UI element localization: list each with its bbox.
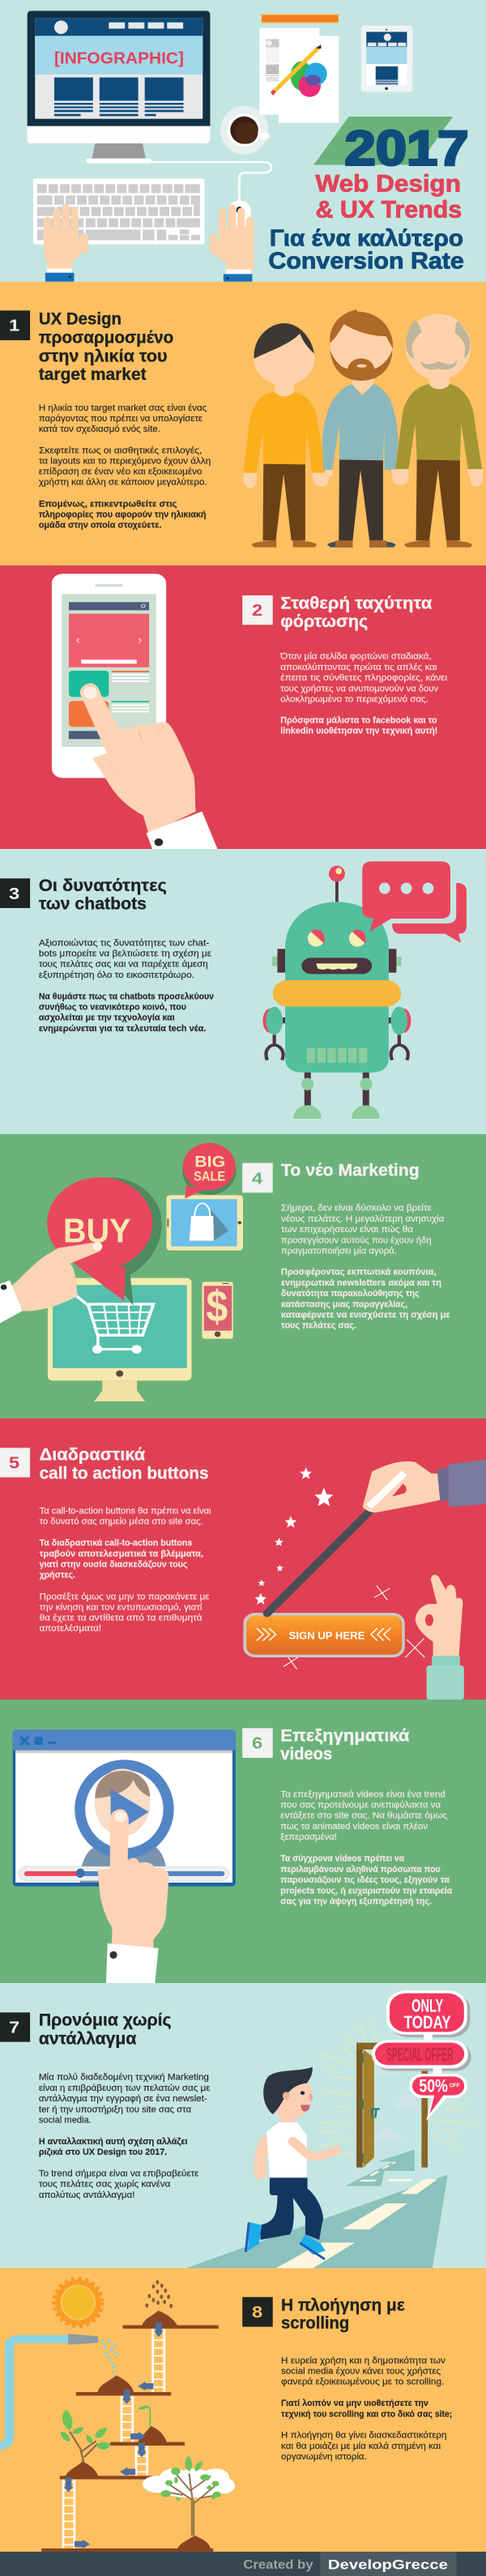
text block: πραγματοποιήσει μία αγορά. (281, 1245, 397, 1256)
text block: αντάλλαγμα την εγγραφή σε ένα newslet- (39, 2093, 207, 2104)
heading (39, 2011, 172, 2048)
panel: 6 explainer videos (0, 1700, 486, 1983)
panel: 3 chatbots (0, 849, 486, 1134)
text block: σας για την άψογη εξυπηρέτησή της. (280, 1896, 432, 1906)
icon: tree (143, 2456, 235, 2535)
icon: hand holding wand (363, 1460, 486, 1512)
number badge 7: 7 (9, 2018, 19, 2036)
illustration: door (356, 2043, 428, 2168)
title: Conversion Rate (268, 249, 464, 274)
illustration: walking boy (245, 2067, 336, 2259)
number badge 5 (0, 1448, 30, 1478)
illustration: offer sign: OFF (450, 2082, 460, 2089)
text block: τους πελάτες σας και να παρέχετε άμεση (39, 958, 208, 969)
number badge 8 (242, 2297, 273, 2327)
icon: monitor with cart (48, 1278, 191, 1401)
number badge 2: 2 (252, 600, 262, 620)
icon: sun (55, 2280, 101, 2326)
text block: το δυνατό σας σημείο μέσα στο site σας. (40, 1516, 203, 1526)
icon: water hose (0, 2334, 118, 2446)
text block: ξεπερασμένα! (280, 1832, 337, 1842)
number badge 1 (0, 310, 30, 340)
text block: ομάδα στην οποία στοχεύετε. (39, 519, 161, 530)
text block: προσεγγίσουν αυτούς που έχουν ήδη (281, 1235, 432, 1245)
text block: κατάστασης μιας παραγγελίας, (281, 1299, 407, 1309)
icon: desktop monitor: [INFOGRAPHIC] (54, 49, 184, 67)
text block: Τα call-to-action buttons θα πρέπει να είναι (40, 1505, 211, 1516)
text block: αποκαλύπτοντας πρώτα τις απλές και (280, 662, 437, 672)
icon: tablet (361, 26, 412, 92)
text block: πληροφορίες που αφορούν την ηλικιακή (39, 509, 206, 519)
icon: pointing hand (98, 1809, 169, 1983)
text block: τους πελάτες σας χωρίς κανένα (39, 2178, 171, 2189)
icon: buy speech bubble: BUY (63, 1213, 130, 1250)
panel: 7 benefits without exchange (0, 1983, 486, 2268)
icon: young plant (61, 2410, 111, 2463)
icon: OK hand (416, 1575, 464, 1700)
text block: παράγοντας που πρέπει να υπολογίσετε (39, 413, 203, 424)
heading: videos (280, 1744, 332, 1764)
title: Για ένα καλύτερο (270, 225, 463, 251)
text block: τα layouts και το περιεχόμενο έχουν άλλη (39, 455, 211, 466)
icon: video window (13, 1729, 236, 1887)
number badge 6: 6 (252, 1734, 262, 1752)
heading: στην ηλικία του (39, 347, 168, 365)
text block: νέους πελάτες. Η μεγαλύτερη ανησυχία (281, 1213, 444, 1224)
text block: απολύτως αντάλλαγμα! (39, 2190, 134, 2200)
icon: design paper with colour swatches and pencil (259, 28, 339, 123)
text block: social media έχουν κάνει τους χρήστες (281, 2365, 441, 2376)
text block: Σκεφτείτε πως οι αισθητικές επιλογές, (39, 445, 202, 455)
icon: sparkles (284, 1585, 424, 1670)
heading (280, 594, 433, 631)
text block: Γιατί λοιπόν να μην υιοθετήσετε την (281, 2398, 428, 2408)
text block: Προσέξτε όμως να μην το παρακάνετε με (40, 1591, 210, 1601)
illustration: offer sign: 50% (419, 2077, 448, 2096)
text block: Αξιοποιώντας τις δυνατότητες των chat- (39, 937, 209, 948)
button: sign up here (243, 1613, 405, 1657)
illustration: three men (243, 309, 483, 548)
heading (280, 1726, 410, 1764)
text block: πως τα animated videos είναι πλέον (280, 1821, 428, 1832)
title: 2017 (345, 121, 469, 175)
number badge 5: 5 (9, 1453, 19, 1472)
text block: τους πελάτες σας. (281, 1320, 356, 1330)
text block: τεχνική του scrolling και στο δικό σας site; (281, 2408, 452, 2419)
text block: χρήστες. (40, 1569, 75, 1580)
text block: Να θυμάστε πως τα chatbots προσελκύουν (39, 991, 214, 1001)
panel: header (0, 0, 486, 282)
text block: εξυπηρέτηση όλο το εικοσιτετράωρο. (39, 970, 194, 980)
icon: big sale bubble (182, 1143, 237, 1198)
number badge 3 (0, 878, 30, 908)
text block: ριζικά στο UX Design του 2017. (39, 2147, 167, 2157)
icon: left hand (44, 207, 88, 282)
text block (281, 2355, 452, 2462)
text block (40, 1505, 211, 1633)
heading: Οι δυνατότητες (39, 876, 167, 895)
text block: social media. (39, 2114, 92, 2125)
footer: DevelopGrecce (328, 2557, 448, 2572)
text block: φανερά εξοικειωμένους με το scrolling. (281, 2376, 444, 2386)
number badge 2 (242, 595, 273, 625)
text block: οργανωμένη ιστορία. (281, 2451, 367, 2462)
heading: Η πλοήγηση με (281, 2296, 405, 2314)
text block: την κίνηση και τον εντυπωσιασμό, γιατί (40, 1601, 202, 1612)
text block: ενημερωτικά newsletters ακόμα και τη (281, 1277, 441, 1288)
text block: περιλαμβάνουν αληθινά πρόσωπα που (280, 1864, 441, 1874)
text block (280, 1789, 453, 1906)
number badge 8: 8 (252, 2302, 262, 2322)
panel: 1 UX Design (0, 282, 486, 565)
text block: παρουσιάζουν τις ιδέες τους, εξηγούν τα (280, 1874, 450, 1885)
number badge 4: 4 (252, 1169, 263, 1188)
text block (281, 1202, 450, 1330)
illustration: robot (262, 866, 411, 1119)
number badge 3: 3 (9, 884, 19, 903)
icon: chat bubbles (362, 861, 467, 943)
icon: seeds (145, 2280, 173, 2308)
illustration: offer sign: TODAY (404, 2013, 451, 2033)
heading: φόρτωσης (280, 612, 368, 631)
icon: flow arrows (64, 2322, 164, 2548)
text block: επίδραση σε έναν νέο και εξοικειωμένο (39, 466, 202, 476)
heading (40, 1445, 209, 1482)
text block (39, 403, 211, 530)
heading: call to action buttons (40, 1464, 209, 1482)
text block: και θα μοιάζει με μία καλά στημένη και (281, 2441, 441, 2451)
text block: Η ευρεία χρήση και η δημοτικότητα των (281, 2355, 446, 2365)
text block: Όταν μία σελίδα φορτώνει σταδιακά, (279, 650, 432, 661)
number badge 7 (0, 2012, 30, 2042)
text block: ασχολείται με την τεχνολογία και (39, 1012, 175, 1022)
title: Web Design (316, 170, 461, 197)
icon: keyboard (33, 178, 205, 245)
heading: των chatbots (39, 894, 147, 913)
heading (39, 876, 167, 913)
text block: Το trend σήμερα είναι να επιβραβεύετε (39, 2168, 199, 2178)
number badge 4 (242, 1163, 273, 1192)
figure: bearded man (322, 309, 399, 548)
illustration: road (186, 2149, 448, 2268)
heading: scrolling (281, 2314, 349, 2332)
heading: αντάλλαγμα (39, 2029, 136, 2048)
text block: γιατί στην ουσία διασκεδάζουν τους (40, 1559, 188, 1569)
text block: που σας προτείνουμε ανεπιφύλακτα να (280, 1799, 441, 1810)
text block: είναι η επιβράβευση των πελατών σας με (39, 2083, 211, 2093)
text block: Η ηλικία του target market σας είναι ένας (39, 403, 207, 413)
text block: Σήμερα, δεν είναι δύσκολο να βρείτε (281, 1202, 432, 1213)
panel: 2 page loading speed (0, 565, 486, 849)
text block: Μία πολύ διαδεδομένη τεχνική Marketing (39, 2071, 209, 2082)
text block: θα έχετε τα αντίθετα από τα επιθυμητά (40, 1612, 202, 1623)
illustration: offer sign: ONLY (411, 1997, 443, 2016)
text block: εντάξετε στο site σας. Να θυμάστε όμως (280, 1810, 447, 1820)
illustration: clouds (373, 2062, 419, 2140)
heading: UX Design (39, 309, 122, 328)
text block: projects τους, ή ευχαριστούν την εταιρεία (280, 1885, 453, 1896)
text block: κατά τον σχεδιασμό ενός site. (39, 424, 160, 434)
text block: καταφέρνετε να ενισχύσετε τη σχέση με (281, 1309, 450, 1320)
text block: ter ή την υποστήριξη του site σας στα (39, 2104, 191, 2114)
heading: προσαρμοσμένο (39, 328, 173, 347)
number badge 6 (242, 1728, 273, 1758)
icon: buy speech bubble (47, 1177, 162, 1306)
text block: Η ανταλλακτική αυτή σχέση αλλάζει (39, 2136, 188, 2147)
heading: Επεξηγηματικά (280, 1726, 410, 1745)
text block: αποτελέσματα! (40, 1623, 101, 1633)
panel: 4 new marketing (0, 1134, 486, 1418)
figure: old man (391, 314, 483, 548)
icon: tablet with shopping bag (166, 1195, 243, 1251)
footer: Created by (243, 2557, 313, 2572)
text block: Η πλοήγηση θα γίνει διασκεδαστικότερη (281, 2429, 446, 2440)
icon: ladders (63, 2329, 164, 2552)
illustration: light rays (319, 2021, 477, 2156)
text block: τους χρήστες να ανυπομονούν να δουν (280, 683, 438, 693)
figure: young man (243, 323, 329, 548)
text block (279, 650, 448, 736)
heading: Διαδραστικά (40, 1445, 145, 1464)
heading: target market (39, 365, 147, 384)
icon: computer mouse (228, 200, 251, 232)
panel: 8 scrolling navigation (0, 2268, 486, 2576)
text block: χρήστη και άλλη σε κάποιον μεγαλύτερο. (39, 476, 207, 487)
text block: linkedin υιοθέτησαν την τεχνική αυτή! (280, 725, 437, 736)
icon: ruler (262, 14, 339, 23)
text block: Τα επεξηγηματικά videos είναι ένα trend (280, 1789, 446, 1799)
text block: των επιχειρήσεων είναι πώς θα (281, 1224, 413, 1235)
icon: magic wand (267, 1512, 369, 1614)
heading (281, 2296, 405, 2332)
title (268, 117, 469, 274)
icon: pointing hand (0, 1242, 102, 1323)
text block (39, 2071, 211, 2200)
text block: τραβούν αποτελεσματικά τα βλέμματα, (40, 1548, 203, 1559)
text block: bots μπορείτε να βελτιώσετε τη σχέση με (39, 948, 212, 958)
heading: Σταθερή ταχύτητα (280, 594, 433, 612)
icon: pointing hand (80, 683, 218, 849)
heading: Το νέο Marketing (281, 1161, 420, 1179)
button: sign up here: SIGN UP HERE (289, 1630, 364, 1642)
icon: coffee cup (220, 106, 270, 155)
icon: sprout (138, 2406, 150, 2428)
footer (0, 2552, 486, 2576)
icon: soil platforms (41, 2310, 219, 2552)
text block: Τα σύγχρονα videos πρέπει να (280, 1853, 405, 1863)
text block: συνήθως το νεανικότερο κοινό, που (39, 1001, 186, 1012)
icon: smartphone (52, 574, 166, 778)
icon: stars (255, 1467, 334, 1605)
text block: ολοκληρωμένο το περιεχόμενό σας. (280, 693, 428, 704)
text block: Επομένως, επικεντρωθείτε στις (39, 498, 177, 509)
number badge 1: 1 (9, 316, 19, 335)
icon: mouse cable (151, 162, 271, 203)
heading (39, 309, 173, 384)
panel: 5 call to action buttons (0, 1418, 486, 1700)
icon: big sale bubble: BIG (194, 1154, 225, 1171)
text block: δυνατότητα παρακολούθησης της (281, 1288, 420, 1299)
text block: Προσφέροντας εκπτωτικά κουπόνια, (281, 1266, 436, 1277)
icon: big sale bubble: SALE (194, 1168, 225, 1184)
title: & UX Trends (316, 195, 462, 223)
text block: Πρόσφατα μάλιστα το facebook και το (280, 714, 437, 725)
icon: right hand (210, 208, 254, 282)
text block (39, 937, 214, 1034)
heading: Προνόμια χωρίς (39, 2011, 172, 2029)
text block: ενημερώνεται για τα τελευταία tech νέα. (39, 1023, 206, 1034)
text block: έπειτα τις σύνθετες πληροφορίες, κάνει (280, 672, 448, 683)
icon: desktop monitor (28, 11, 210, 163)
illustration: offer sign (372, 1990, 471, 2121)
icon: phone with dollar: $ (206, 1282, 228, 1332)
text block: Τα διαδραστικά call-to-action buttons (40, 1537, 193, 1548)
